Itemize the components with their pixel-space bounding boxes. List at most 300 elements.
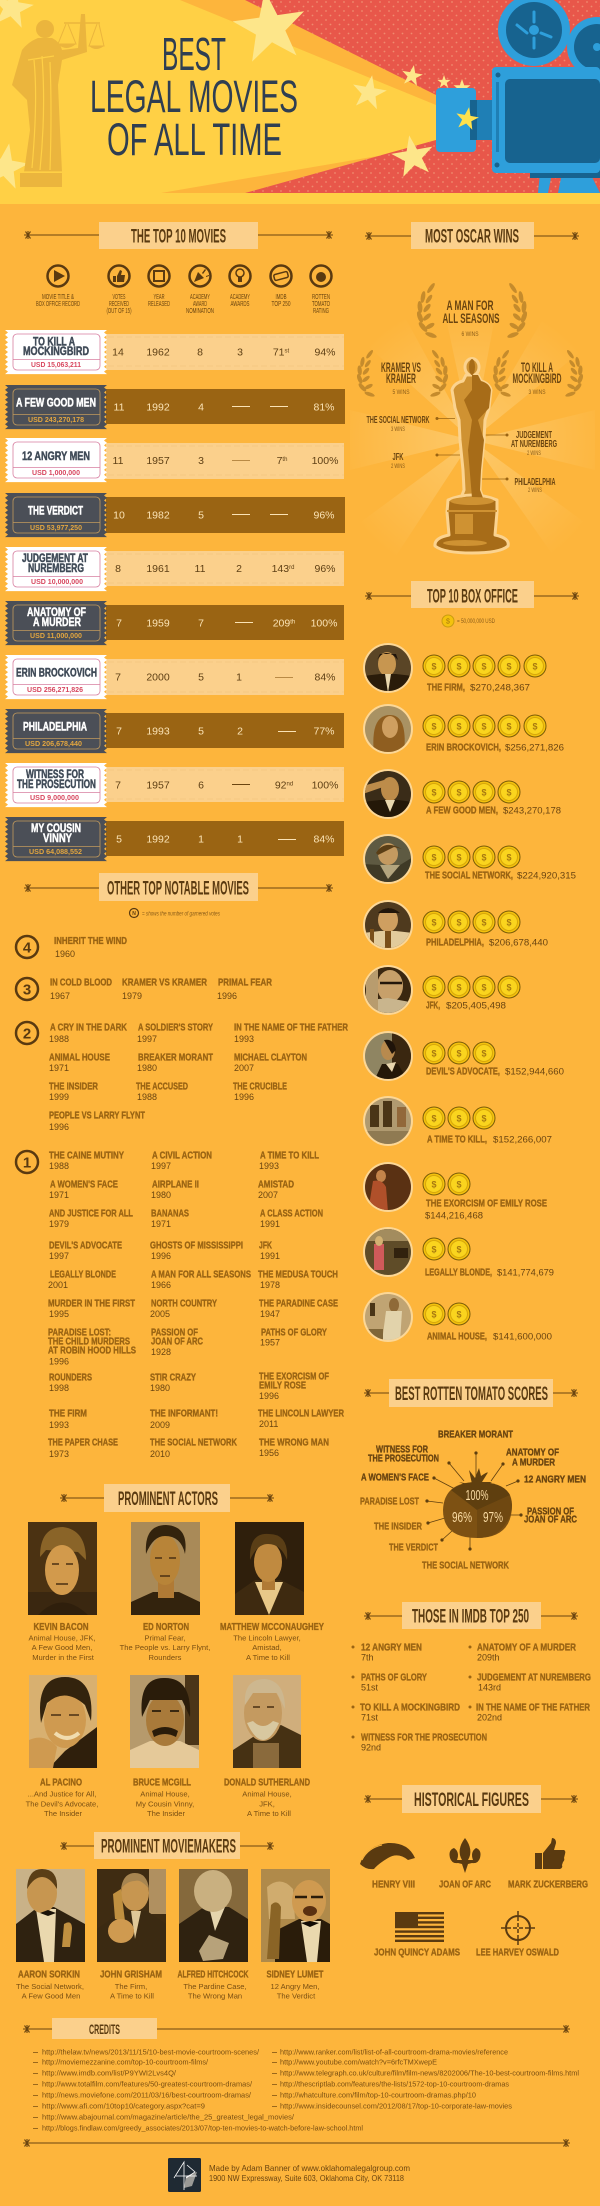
group: 1 vote: THE WRONG MAN — [259, 1438, 329, 1448]
credits links: http://whatculture.com/film/top-10-courtroom-dramas.php/10 — [280, 2092, 476, 2100]
entry: Erin Brockovich: $ — [456, 722, 462, 732]
row: 12 Angry Men: 7 — [277, 455, 282, 467]
icon: Henry VIII feathered hat — [360, 1843, 415, 1890]
row: My Cousin Vinny — [5, 817, 344, 861]
row: Philadelphia: 77% — [313, 726, 335, 738]
group: 2 votes: 1996 — [49, 1122, 69, 1132]
entry: Erin Brockovich: ERIN BROCKOVICH, — [426, 742, 501, 754]
tomato labels: PASSION OF — [527, 1506, 574, 1518]
group: 2 votes: MICHAEL CLAYTON — [234, 1052, 307, 1064]
group: 1 vote: THE CAINE MUTINY — [49, 1150, 124, 1162]
photo: Donald Sutherland — [233, 1675, 301, 1768]
panel: credits — [23, 2018, 579, 2147]
winner: The Social Network: THE SOCIAL NETWORK — [366, 414, 430, 426]
entry: The Firm: $ — [456, 662, 462, 672]
photo: Aaron Sorkin — [16, 1869, 85, 1962]
row: Witness for the Prosecution: 92 — [275, 780, 286, 792]
row: 12 Angry Men: 12 ANGRY MEN — [22, 451, 90, 463]
group: 1 vote: 1947 — [260, 1309, 280, 1319]
row: Judgement at Nuremberg: 11 — [195, 563, 206, 575]
row: My Cousin Vinny: VINNY — [43, 833, 72, 845]
winner: Kramer vs Kramer: KRAMER VS — [381, 359, 421, 375]
winner: A Man for All Seasons — [416, 282, 528, 339]
group: 1 vote: 1980 — [150, 1383, 170, 1393]
row: Witness for the Prosecution: 100% — [312, 780, 338, 792]
footer — [168, 2158, 410, 2192]
tomato labels: 12 ANGRY MEN — [524, 1474, 586, 1486]
entry: The Social Network: $ — [431, 852, 437, 862]
entry: The Exorcism of Emily Rose: $ — [431, 1180, 437, 1190]
banner — [0, 0, 600, 204]
caption: Sidney Lumet: 12 Angry Men, — [271, 1982, 319, 1991]
chart: tomato: 100% — [466, 1487, 488, 1504]
entry: A Few Good Men — [363, 769, 561, 819]
statue of justice — [12, 14, 104, 187]
entry: Philadelphia: PHILADELPHIA, — [426, 938, 484, 948]
imdb list: 92nd — [361, 1742, 381, 1752]
row: A Few Good Men: 11 — [114, 402, 125, 414]
tomato labels: JOAN OF ARC — [524, 1514, 577, 1526]
row: The Verdict: 5 — [198, 510, 204, 522]
chart: tomato: 97% — [483, 1509, 503, 1526]
group: 1 vote: A CLASS ACTION — [260, 1208, 323, 1220]
caption: Kevin Bacon: A Few Good Men, — [32, 1643, 92, 1652]
icon: Joan of Arc fleur-de-lis: JOAN OF ARC — [439, 1880, 491, 1890]
votes legend: N — [132, 911, 136, 917]
caption: John Grisham: A Time to Kill — [110, 1992, 154, 2000]
entry: The Social Network — [363, 834, 576, 884]
row: To Kill a Mockingbird: 71 — [273, 347, 285, 359]
entry: Erin Brockovich — [363, 704, 564, 754]
caption: Bruce McGill — [133, 1778, 194, 1818]
tomato labels: THE SOCIAL NETWORK — [422, 1560, 510, 1572]
group: 1 vote: 1993 — [259, 1161, 279, 1171]
tomato labels: BREAKER MORANT — [438, 1430, 513, 1440]
caption: Sidney Lumet — [266, 1970, 324, 2000]
row: Erin Brockovich: 1 — [236, 672, 242, 684]
group: 1 vote: 1966 — [151, 1280, 171, 1290]
group: 3 votes: KRAMER VS KRAMER — [122, 978, 208, 988]
credits links: http://www.youtube.com/watch?v=6rfcTMXwepE — [280, 2060, 437, 2066]
column icons and labels: TOP 250 — [272, 299, 290, 308]
group: 1 vote — [16, 1150, 345, 1459]
winner: Judgement at Nuremberg: 2 WINS — [527, 451, 541, 457]
column icons and labels: RELEASED — [148, 299, 170, 308]
entry: Philadelphia: $ — [431, 918, 437, 928]
winner: To Kill a Mockingbird: TO KILL A — [521, 359, 553, 375]
row: 12 Angry Men: 1957 — [146, 455, 170, 467]
entry: Philadelphia: $206,678,440 — [489, 938, 548, 948]
entry: Devil's Advocate: $ — [481, 1048, 487, 1058]
group: 1 vote: THE LINCOLN LAWYER — [258, 1408, 345, 1420]
credits links: http://www.ranker.com/list/list-of-all-courtroom-drama-movies/reference — [280, 2050, 508, 2056]
group: 1 vote: MURDER IN THE FIRST — [48, 1298, 135, 1310]
winner: A Man for All Seasons: A MAN FOR — [446, 297, 494, 313]
group: 2 votes: 1988 — [49, 1034, 69, 1044]
group: 2 votes: THE CRUCIBLE — [233, 1082, 287, 1092]
winner: JFK — [391, 451, 460, 470]
winner: Philadelphia: 2 WINS — [528, 488, 542, 494]
caption: Ed Norton: Primal Fear, — [145, 1634, 185, 1642]
entry: JFK: $ — [506, 982, 512, 992]
column icons and labels: VOTES — [112, 292, 126, 301]
tomato labels: THE INSIDER — [374, 1522, 423, 1532]
row: Anatomy of a Murder: 209 — [273, 618, 290, 630]
entry: Devil's Advocate — [363, 1031, 564, 1081]
caption: Bruce McGill: The Insider — [147, 1809, 185, 1818]
entry: The Social Network: $ — [456, 852, 462, 862]
group: 2 votes: 2 — [23, 1026, 31, 1042]
entry: Erin Brockovich: $ — [481, 722, 487, 732]
caption: Alfred Hitchcock: The Pardine Case, — [183, 1982, 247, 1991]
winner: Kramer vs Kramer: KRAMER — [386, 370, 416, 386]
column icons and labels: RATING — [313, 306, 329, 315]
entry: Animal House: $ — [456, 1310, 462, 1320]
entry: The Firm: $270,248,367 — [470, 682, 530, 692]
row: To Kill a Mockingbird: TO KILL A — [33, 336, 75, 348]
group: 1 vote: 1971 — [49, 1190, 69, 1200]
row: To Kill a Mockingbird: 3 — [237, 347, 243, 359]
group: 4 votes: 1960 — [55, 949, 75, 959]
column icons and labels: AWARDS — [230, 299, 250, 308]
group: 1 vote: 1996 — [259, 1391, 279, 1401]
row: A Few Good Men: 81% — [313, 402, 335, 414]
caption: Al Pacino: AL PACINO — [40, 1778, 82, 1788]
entry: The Exorcism of Emily Rose: $ — [456, 1180, 462, 1190]
row: Philadelphia: 5 — [198, 726, 204, 738]
group: 3 votes: 1996 — [217, 991, 237, 1001]
group: 2 votes: A CRY IN THE DARK — [50, 1022, 128, 1034]
row: The Verdict: 96% — [313, 510, 335, 522]
caption: Al Pacino: The Devil's Advocate, — [26, 1800, 98, 1808]
imdb list: PATHS OF GLORY — [361, 1672, 427, 1684]
caption: Matthew McConaughey: MATTHEW MCCONAUGHEY — [220, 1622, 324, 1633]
film projector — [436, 0, 600, 193]
entry: JFK: $ — [431, 982, 437, 992]
group: 1 vote: LEGALLY BLONDE — [50, 1270, 116, 1280]
group: 4 votes: INHERIT THE WIND — [54, 936, 127, 947]
group: 2 votes: 1988 — [137, 1092, 157, 1102]
group: 2 votes: 1993 — [234, 1034, 254, 1044]
group: 1 vote: PASSION OF — [151, 1328, 198, 1338]
row: Philadelphia: USD 206,678,440 — [25, 741, 82, 748]
group: 3 votes — [16, 978, 273, 1001]
group: 1 vote: STIR CRAZY — [150, 1372, 196, 1384]
row: Anatomy of a Murder: th — [290, 620, 295, 626]
row: My Cousin Vinny: MY COUSIN — [31, 823, 81, 835]
entry: Devil's Advocate: $152,944,660 — [505, 1066, 564, 1076]
group: 2 votes: 2007 — [234, 1063, 254, 1073]
group: 1 vote: JFK — [259, 1240, 273, 1252]
imdb list: 12 ANGRY MEN — [361, 1642, 422, 1654]
group: 2 votes: 1996 — [234, 1092, 254, 1102]
entry: Devil's Advocate: $ — [456, 1048, 462, 1058]
heading: prominent actors — [60, 1484, 274, 1512]
credits links: http://moviemezzanine.com/top-10-courtroom-films/ — [42, 2060, 208, 2066]
row: Anatomy of a Murder: USD 11,000,000 — [30, 633, 82, 640]
row: To Kill a Mockingbird: 94% — [314, 347, 336, 359]
group: 1 vote: 1998 — [49, 1383, 69, 1393]
group: 1 vote: PATHS OF GLORY — [261, 1328, 327, 1338]
entry: A Few Good Men: $ — [481, 788, 487, 798]
coin legend — [442, 615, 496, 627]
group: 1 vote: BANANAS — [151, 1208, 189, 1220]
row: Judgement at Nuremberg: 96% — [314, 563, 336, 575]
winner: The Social Network — [366, 414, 455, 433]
group: 1 vote: 2011 — [259, 1419, 278, 1429]
group: 1 vote: 1993 — [49, 1420, 69, 1430]
caption: Donald Sutherland: A Time to Kill — [247, 1809, 291, 1818]
group: 1 vote: NORTH COUNTRY — [151, 1298, 217, 1310]
group: 2 votes: 1980 — [137, 1063, 157, 1073]
row: Anatomy of a Murder — [5, 601, 344, 645]
winner: JFK: 2 WINS — [391, 464, 405, 470]
caption: Matthew McConaughey: Amistad, — [252, 1643, 282, 1652]
row: The Verdict: THE VERDICT — [28, 506, 83, 518]
winner: Kramer vs Kramer: 5 WINS — [392, 390, 410, 396]
panel: historical figures — [360, 1785, 588, 1958]
panel: best rotten tomato scores — [360, 1379, 586, 1572]
row: Philadelphia: 2 — [237, 726, 243, 738]
row: Erin Brockovich: 5 — [198, 672, 204, 684]
row: My Cousin Vinny: 5 — [116, 834, 122, 846]
credit line: 1900 NW Expressway, Suite 603, Oklahoma City, OK 73118 — [209, 2173, 404, 2183]
credit line — [209, 2163, 410, 2183]
entry: A Time to Kill — [363, 1096, 552, 1146]
row: To Kill a Mockingbird: MOCKINGBIRD — [23, 346, 89, 358]
group: 1 vote: AND JUSTICE FOR ALL — [49, 1208, 133, 1220]
row: Anatomy of a Murder: 100% — [311, 618, 337, 630]
caption: Kevin Bacon: Animal House, JFK, — [28, 1634, 96, 1642]
icon: John Quincy Adams flag: JOHN QUINCY ADAMS — [374, 1948, 460, 1958]
heading: the top 10 movies — [24, 222, 333, 249]
winner: Philadelphia: PHILADELPHIA — [514, 476, 556, 488]
column icons and labels: YEAR — [154, 292, 165, 301]
group: 1 vote: THE EXORCISM OF — [259, 1372, 329, 1382]
entry: JFK: $ — [481, 982, 487, 992]
group: 2 votes: THE ACCUSED — [136, 1082, 188, 1092]
credits links: http://www.afi.com/10top10/category.aspx?cat=9 — [42, 2104, 205, 2110]
group: 1 vote: 1980 — [151, 1190, 171, 1200]
group: 1 vote: PARADISE LOST: — [48, 1328, 111, 1338]
entry: JFK: $205,405,498 — [446, 1000, 506, 1010]
imdb list: 209th — [477, 1652, 500, 1662]
caption: Ed Norton: Rounders — [149, 1653, 182, 1662]
column icons and labels: RECEIVED — [109, 299, 129, 308]
coin legend: = 50,000,000 USD — [457, 619, 496, 625]
entry: Animal House: $ — [431, 1310, 437, 1320]
caption: Donald Sutherland: DONALD SUTHERLAND — [224, 1778, 310, 1788]
row: The Verdict: 1982 — [146, 510, 170, 522]
caption: Aaron Sorkin: The Social Network, — [16, 1982, 84, 1991]
row: Anatomy of a Murder: 1959 — [146, 618, 170, 630]
group: 2 votes: A SOLDIER'S STORY — [138, 1022, 213, 1034]
group: 1 vote: A WOMEN'S FACE — [50, 1180, 118, 1190]
imdb list: ANATOMY OF A MURDER — [477, 1642, 577, 1654]
title: LEGAL MOVIES — [90, 71, 298, 122]
imdb list: 143rd — [478, 1682, 501, 1692]
caption: Alfred Hitchcock — [178, 1970, 249, 2000]
entry: The Social Network: $ — [506, 852, 512, 862]
row: Witness for the Prosecution — [5, 763, 344, 807]
photo: Al Pacino — [29, 1675, 97, 1768]
entry: Erin Brockovich: $ — [506, 722, 512, 732]
caption: Al Pacino: ...And Justice for All, — [28, 1790, 96, 1798]
heading: the top 10 movies: THE TOP 10 MOVIES — [131, 226, 226, 248]
row: My Cousin Vinny: 1 — [198, 834, 204, 846]
entry: Legally Blonde: $ — [456, 1244, 462, 1254]
group: 1 vote: 1957 — [260, 1338, 280, 1348]
row: Judgement at Nuremberg: 2 — [236, 563, 242, 575]
entry: Erin Brockovich: $256,271,826 — [505, 742, 564, 752]
entry: The Exorcism of Emily Rose — [363, 1162, 547, 1220]
group: 1 vote: GHOSTS OF MISSISSIPPI — [150, 1240, 243, 1252]
column icons and labels: ACADEMY — [230, 292, 250, 301]
column icons and labels: MOVIE TITLE & — [42, 292, 74, 301]
entry: The Exorcism of Emily Rose: $144,216,468 — [425, 1210, 483, 1220]
group: 1 vote: 1 — [23, 1154, 31, 1172]
group: 1 vote: 2007 — [258, 1190, 278, 1200]
group: 1 vote: THE SOCIAL NETWORK — [150, 1438, 238, 1448]
panel: those in imdb top 250 — [352, 1602, 591, 1752]
entry: The Firm: $ — [431, 662, 437, 672]
credit line: Made by Adam Banner of www.oklahomalegalgroup.com — [209, 2163, 410, 2173]
row: The Verdict: 10 — [113, 510, 125, 522]
heading: those in imdb top 250 — [364, 1602, 578, 1629]
caption: Kevin Bacon: KEVIN BACON — [34, 1622, 88, 1633]
caption: Bruce McGill: BRUCE MCGILL — [133, 1778, 191, 1788]
entry: The Firm — [363, 643, 546, 694]
row: Judgement at Nuremberg: NUREMBERG — [28, 563, 84, 575]
entry: The Social Network: $224,920,315 — [517, 870, 576, 880]
row: Erin Brockovich: USD 256,271,826 — [27, 687, 83, 694]
column icons and labels: NOMINATION — [186, 306, 214, 315]
caption: John Grisham — [100, 1970, 162, 2000]
entry: Legally Blonde: LEGALLY BLONDE, — [425, 1268, 492, 1278]
votes legend — [130, 908, 220, 918]
group: 1 vote: EMILY ROSE — [259, 1380, 306, 1392]
chart: tomato — [425, 1451, 523, 1551]
heading: prominent actors: PROMINENT ACTORS — [118, 1489, 218, 1510]
imdb list: WITNESS FOR THE PROSECUTION — [361, 1732, 487, 1744]
imdb list: 71st — [361, 1712, 379, 1722]
group: 1 vote: A MAN FOR ALL SEASONS — [151, 1270, 251, 1280]
photo: Sidney Lumet — [261, 1869, 330, 1962]
group: 3 votes: PRIMAL FEAR — [218, 978, 273, 988]
credits links: http://news.moviefone.com/2011/03/16/best-courtroom-dramas/ — [42, 2092, 251, 2100]
oscar background rays — [350, 290, 595, 565]
entry: Animal House — [363, 1292, 552, 1342]
row: 12 Angry Men — [5, 438, 344, 482]
imdb list: TO KILL A MOCKINGBIRD — [360, 1702, 460, 1714]
caption: Aaron Sorkin: AARON SORKIN — [18, 1970, 80, 1980]
title: BEST — [162, 28, 226, 80]
entry: The Firm: $ — [506, 662, 512, 672]
heading: most oscar wins — [365, 222, 579, 249]
entry: Erin Brockovich: $ — [532, 722, 538, 732]
imdb list — [352, 1642, 591, 1752]
title: OF ALL TIME — [107, 114, 282, 165]
caption: Aaron Sorkin: A Few Good Men — [22, 1992, 80, 2000]
group: 1 vote: THE PAPER CHASE — [48, 1438, 118, 1448]
entry: Philadelphia: $ — [456, 918, 462, 928]
group: 1 vote: 1978 — [260, 1280, 280, 1290]
photo: Kevin Bacon — [28, 1522, 97, 1615]
row: Judgement at Nuremberg — [5, 547, 344, 591]
heading: prominent moviemakers — [60, 1832, 274, 1859]
caption: Donald Sutherland: JFK, — [259, 1800, 275, 1808]
caption: Alfred Hitchcock: ALFRED HITCHCOCK — [178, 1970, 249, 1980]
heading: credits: CREDITS — [89, 2021, 120, 2037]
caption: Bruce McGill: My Cousin Vinny, — [136, 1800, 194, 1808]
entry: A Few Good Men: $ — [431, 788, 437, 798]
column icons and labels: TOMATO — [312, 299, 330, 308]
photo: Matthew McConaughey — [235, 1522, 304, 1615]
group: 1 vote: 1997 — [49, 1251, 69, 1261]
row: A Few Good Men — [5, 385, 345, 429]
credits links — [33, 2050, 579, 2132]
group: 1 vote: 1995 — [49, 1309, 69, 1319]
row: Witness for the Prosecution: 7 — [115, 780, 121, 792]
winner: JFK: JFK — [392, 451, 404, 463]
winner: Judgement at Nuremberg: JUDGEMENT — [516, 429, 552, 441]
caption: Ed Norton: The People vs. Larry Flynt, — [120, 1643, 210, 1652]
row: Anatomy of a Murder: 7 — [198, 618, 204, 630]
row: Judgement at Nuremberg: JUDGEMENT AT — [22, 553, 88, 565]
row: 12 Angry Men: USD 1,000,000 — [32, 470, 80, 477]
row: To Kill a Mockingbird: USD 15,063,211 — [31, 362, 81, 369]
row: 12 Angry Men: 3 — [198, 455, 204, 467]
row: Witness for the Prosecution: USD 9,000,000 — [30, 795, 79, 802]
credits links: http://www.abajournal.com/magazine/article/the_25_greatest_legal_movies/ — [42, 2114, 294, 2122]
winner: Judgement at Nuremberg: AT NUREMBERG — [511, 438, 557, 450]
photo: Bruce McGill — [130, 1675, 199, 1768]
winner: Philadelphia — [482, 476, 556, 494]
panel: prominent moviemakers — [16, 1832, 330, 2000]
icon: Mark Zuckerberg thumbs up — [508, 1838, 588, 1890]
row: Philadelphia — [5, 709, 344, 753]
coin legend: $ — [446, 618, 450, 626]
entry: Animal House: $141,600,000 — [493, 1332, 552, 1342]
entry: A Time to Kill: $ — [431, 1114, 437, 1124]
winner: To Kill a Mockingbird — [492, 349, 584, 398]
credits links: http://www.insidecounsel.com/2012/08/17/top-10-corporate-law-movies — [280, 2104, 513, 2110]
imdb list: 7th — [361, 1652, 374, 1662]
caption: Matthew McConaughey: A Time to Kill — [246, 1653, 290, 1662]
group: 2 votes: 1997 — [137, 1034, 157, 1044]
credits links: http://www.totalfilm.com/features/50-greatest-courtroom-dramas/ — [42, 2082, 252, 2088]
credits links: http://www.telegraph.co.uk/culture/film/film-news/8202006/The-10-best-courtroom-films.html — [280, 2070, 579, 2078]
entry: JFK — [363, 965, 520, 1015]
group: 1 vote: 1988 — [49, 1161, 69, 1171]
row: Witness for the Prosecution: THE PROSECUTION — [17, 779, 96, 791]
group: 1 vote: 1996 — [49, 1356, 69, 1366]
icon: Lee Harvey Oswald crosshair — [476, 1911, 559, 1958]
row: Witness for the Prosecution: 6 — [198, 780, 204, 792]
row: To Kill a Mockingbird: 14 — [112, 347, 124, 359]
photo: John Grisham — [97, 1869, 166, 1962]
row: 12 Angry Men: 100% — [312, 455, 338, 467]
tomato labels: THE VERDICT — [389, 1542, 438, 1554]
caption: Matthew McConaughey — [220, 1622, 324, 1662]
entry: Animal House: ANIMAL HOUSE, — [427, 1332, 487, 1342]
row: Anatomy of a Murder: A MURDER — [33, 617, 82, 629]
row: 12 Angry Men: 11 — [113, 455, 124, 467]
row: 12 Angry Men: th — [282, 457, 287, 463]
votes legend: = shows the number of garnered votes — [142, 912, 220, 918]
caption: Donald Sutherland — [224, 1778, 310, 1818]
entry: Legally Blonde: $141,774,679 — [497, 1268, 554, 1278]
